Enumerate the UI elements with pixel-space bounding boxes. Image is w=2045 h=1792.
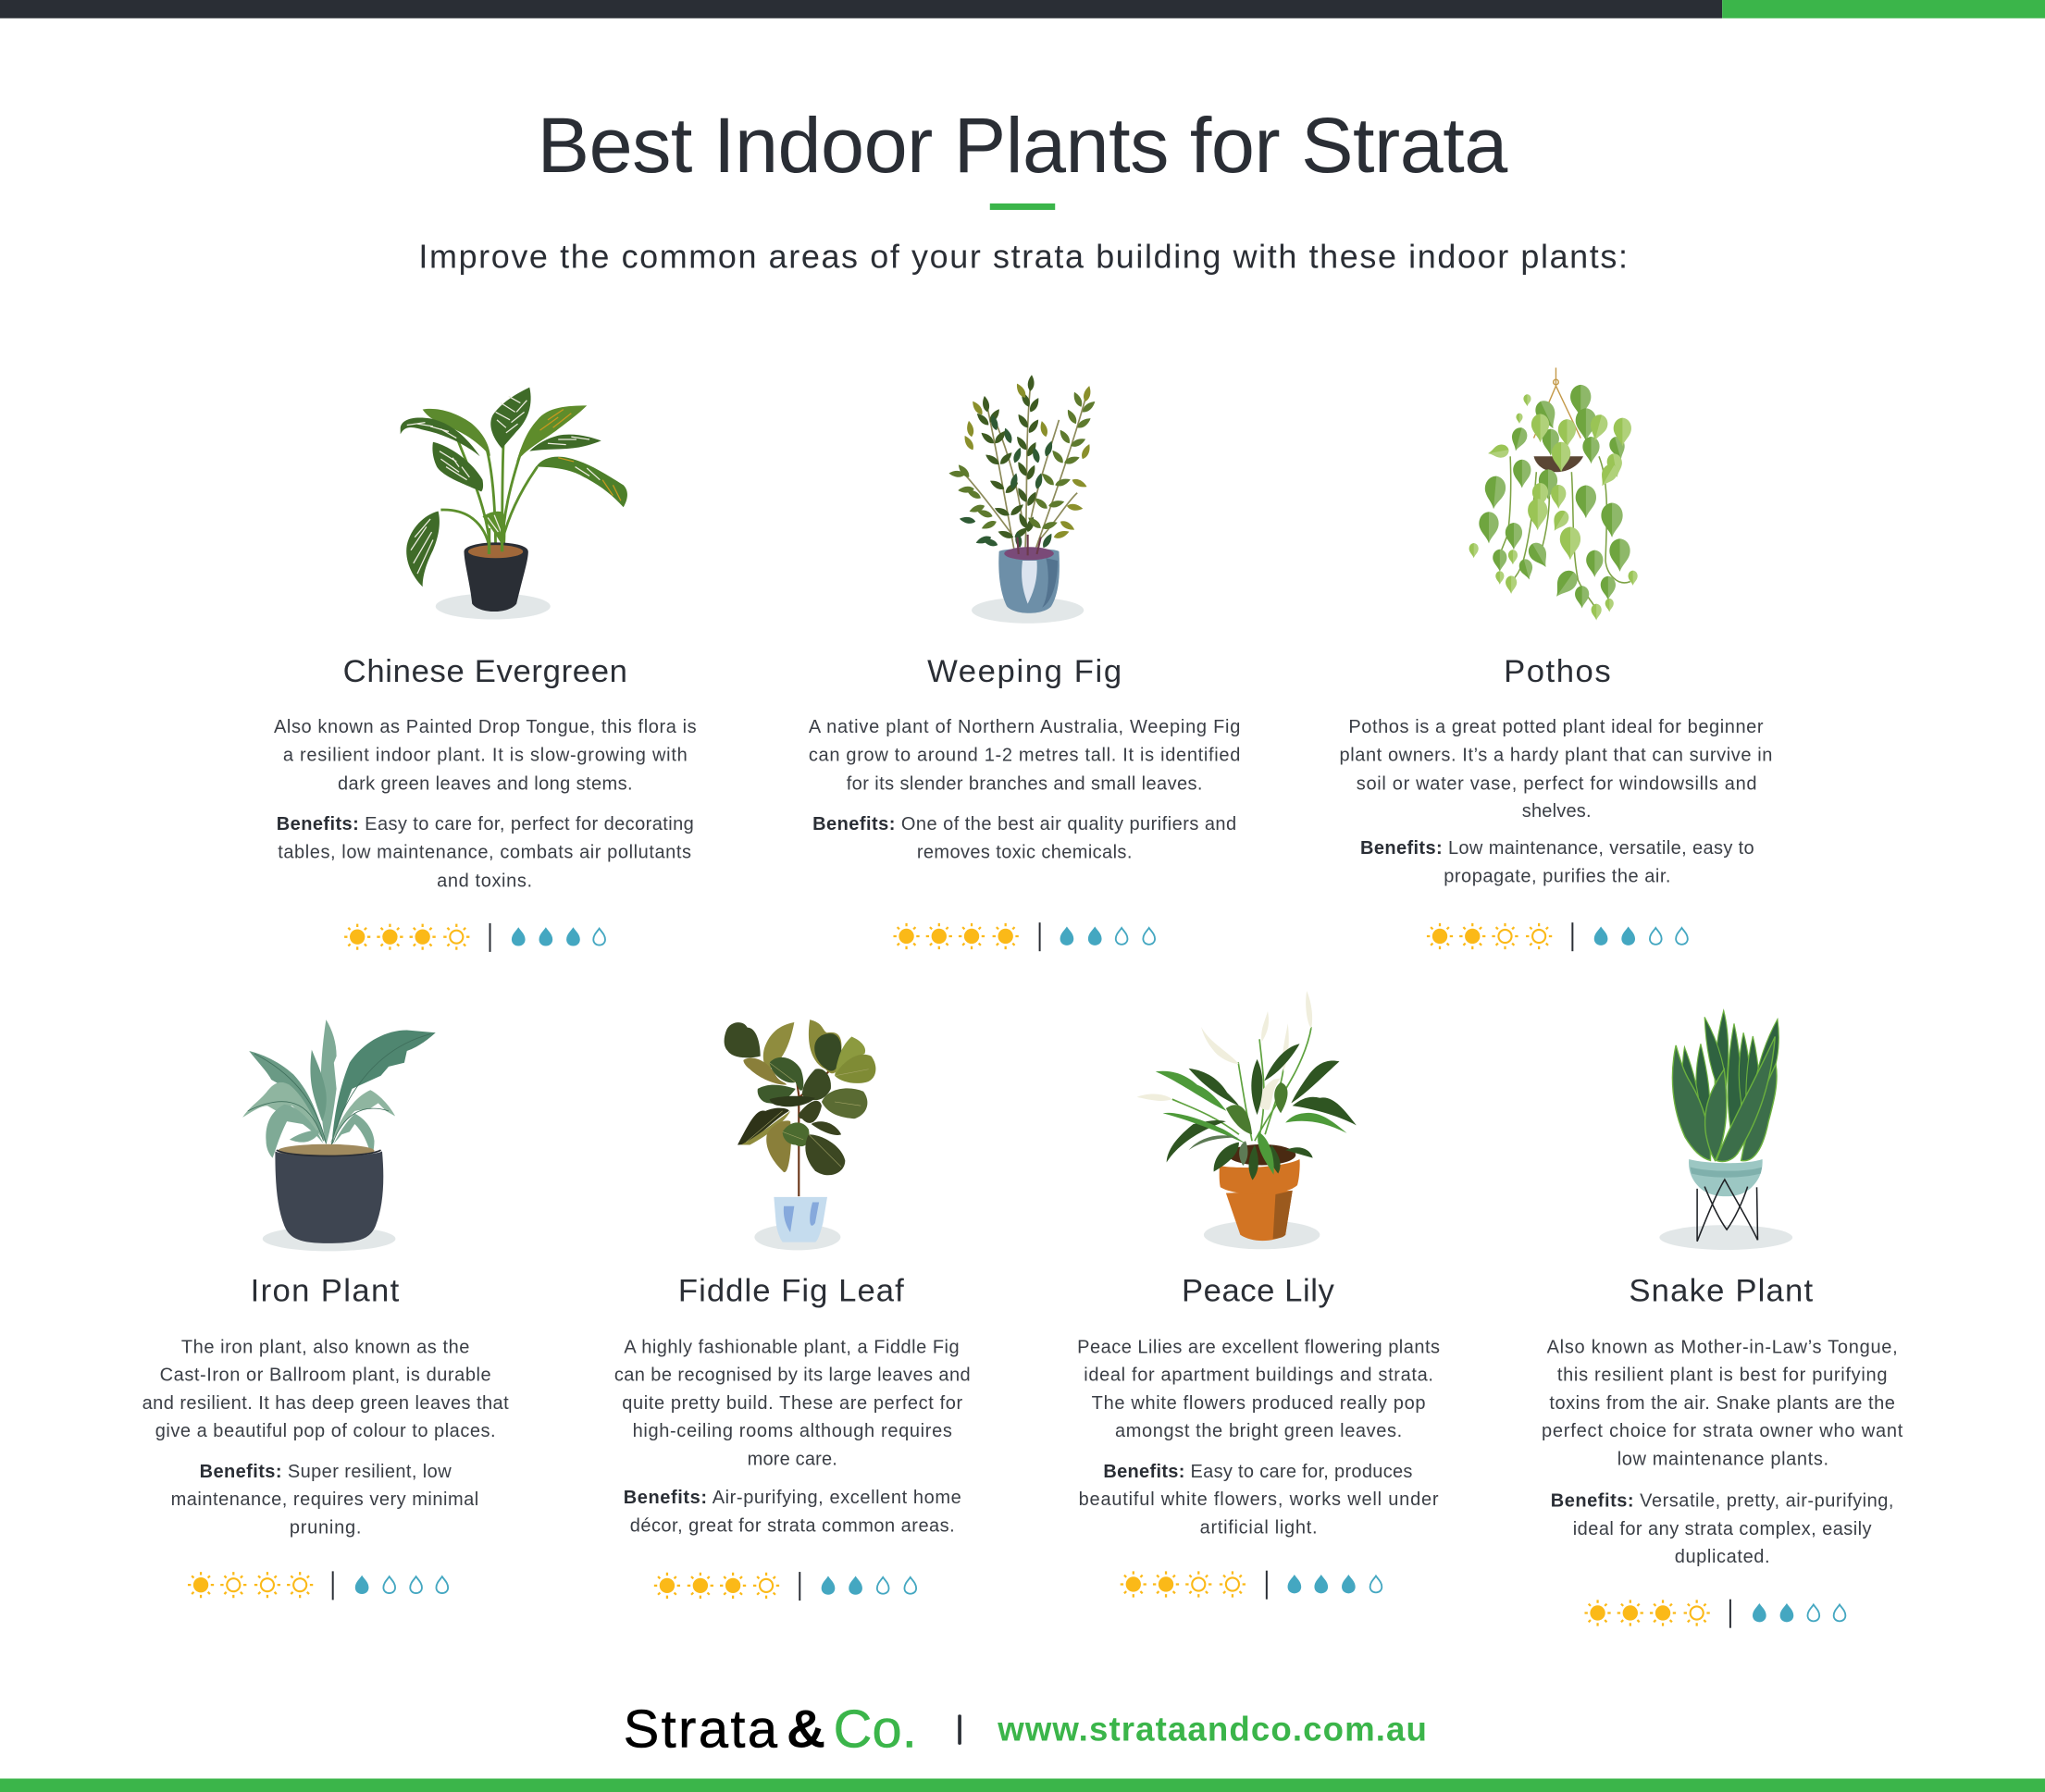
rating divider <box>1571 922 1573 951</box>
plant name: Pothos <box>1504 654 1611 689</box>
light rating <box>1427 923 1552 949</box>
description <box>614 1337 971 1470</box>
description: toxins from the air. Snake plants are the <box>1549 1393 1895 1414</box>
water rating <box>355 1576 448 1594</box>
benefits <box>1551 1491 1894 1567</box>
description: and resilient. It has deep green leaves that <box>143 1393 509 1414</box>
description: The white flowers produced really pop <box>1092 1393 1426 1414</box>
benefits: Benefits: Versatile, pretty, air-purifying, <box>1551 1491 1894 1512</box>
plant name: Peace Lily <box>1182 1274 1335 1309</box>
plant name: Snake Plant <box>1629 1274 1813 1309</box>
benefits <box>1079 1462 1439 1539</box>
rating divider <box>1729 1600 1731 1628</box>
description: for its slender branches and small leaves. <box>847 773 1203 794</box>
benefits: Benefits: One of the best air quality purifiers and <box>812 814 1236 834</box>
description: more care. <box>748 1450 837 1470</box>
description <box>809 717 1240 794</box>
description: Peace Lilies are excellent flowering plants <box>1077 1337 1440 1357</box>
benefits: Benefits: Super resilient, low <box>200 1462 452 1482</box>
benefits: Benefits: Low maintenance, versatile, easy to <box>1360 838 1754 859</box>
description <box>1542 1337 1903 1470</box>
light rating <box>893 923 1019 949</box>
light rating <box>344 924 469 950</box>
description: Cast-Iron or Ballroom plant, is durable <box>160 1366 491 1386</box>
footer logo <box>624 1700 917 1760</box>
rating divider <box>799 1572 800 1600</box>
panel: Chinese Evergreen <box>274 388 697 952</box>
description: quite pretty build. These are perfect for <box>622 1393 962 1414</box>
website url: www.strataandco.com.au <box>997 1711 1427 1749</box>
plant: Snake Plant <box>1659 1010 1792 1250</box>
benefits: Benefits: Easy to care for, produces <box>1103 1462 1412 1482</box>
panel: Pothos <box>1339 367 1772 951</box>
benefits <box>277 814 694 891</box>
plant: Peace Lily <box>1136 991 1357 1249</box>
description: A highly fashionable plant, a Fiddle Fig <box>624 1337 960 1357</box>
rating divider <box>1039 922 1041 951</box>
water rating <box>1288 1575 1382 1593</box>
benefits <box>1360 838 1754 886</box>
benefits: pruning. <box>290 1518 361 1539</box>
light rating <box>188 1572 313 1598</box>
footer logo: & <box>787 1700 825 1760</box>
water rating <box>1753 1603 1845 1622</box>
description <box>143 1337 509 1441</box>
panel: Weeping Fig <box>809 375 1240 951</box>
description <box>274 717 697 794</box>
description: a resilient indoor plant. It is slow-growing with <box>283 745 688 765</box>
description <box>1077 1337 1440 1441</box>
rating divider <box>490 923 491 952</box>
description <box>1339 717 1772 822</box>
light rating <box>1121 1571 1246 1598</box>
footer logo: Co. <box>834 1700 917 1760</box>
benefits: propagate, purifies the air. <box>1444 866 1670 886</box>
benefits <box>812 814 1236 862</box>
water rating <box>1060 927 1155 945</box>
benefits: décor, great for strata common areas. <box>630 1515 955 1536</box>
description: Also known as Painted Drop Tongue, this flora is <box>274 717 697 737</box>
description: dark green leaves and long stems. <box>338 773 633 794</box>
footer divider <box>958 1714 961 1745</box>
subtitle: Improve the common areas of your strata building with these indoor plants: <box>418 238 1628 276</box>
description: Pothos is a great potted plant ideal for beginner <box>1348 717 1764 737</box>
plant name: Fiddle Fig Leaf <box>678 1274 904 1309</box>
description: shelves. <box>1522 801 1592 822</box>
description: A native plant of Northern Australia, Weeping Fig <box>809 717 1240 737</box>
description: soil or water vase, perfect for windowsills and <box>1357 773 1757 794</box>
benefits: artificial light. <box>1200 1518 1318 1539</box>
title: Best Indoor Plants for Strata <box>538 101 1508 189</box>
description: this resilient plant is best for purifying <box>1557 1366 1887 1386</box>
description: perfect choice for strata owner who want <box>1542 1421 1903 1441</box>
description: give a beautiful pop of colour to places. <box>155 1421 496 1441</box>
plant: Chinese Evergreen <box>401 388 627 619</box>
panel: Peace Lily <box>1077 991 1440 1600</box>
water rating <box>1594 927 1688 945</box>
plant name: Chinese Evergreen <box>343 654 627 689</box>
plant: Iron Plant <box>242 1020 436 1251</box>
benefits: maintenance, requires very minimal <box>171 1489 478 1510</box>
benefits: ideal for any strata complex, easily <box>1573 1519 1872 1539</box>
description: can grow to around 1-2 metres tall. It is identified <box>809 745 1240 765</box>
footer logo: Strata <box>624 1700 778 1760</box>
benefits: beautiful white flowers, works well under <box>1079 1489 1439 1510</box>
plant: Fiddle Fig Leaf <box>725 1020 875 1250</box>
benefits: duplicated. <box>1675 1547 1770 1567</box>
description: amongst the bright green leaves. <box>1115 1421 1402 1441</box>
panel: Iron Plant <box>143 1020 509 1600</box>
panel: Snake Plant <box>1542 1010 1903 1628</box>
water rating <box>822 1576 916 1595</box>
top bar <box>0 0 2045 19</box>
description: low maintenance plants. <box>1617 1450 1828 1470</box>
description: can be recognised by its large leaves and <box>614 1366 971 1386</box>
water rating <box>512 927 605 946</box>
benefits: Benefits: Easy to care for, perfect for decorating <box>277 814 694 834</box>
description: ideal for apartment buildings and strata. <box>1084 1366 1433 1386</box>
bottom bar <box>0 1778 2045 1792</box>
light rating <box>654 1573 779 1599</box>
benefits: removes toxic chemicals. <box>917 842 1132 862</box>
benefits: and toxins. <box>437 871 532 891</box>
plant name: Iron Plant <box>251 1274 400 1309</box>
description: plant owners. It’s a hardy plant that can survive in <box>1339 745 1772 765</box>
benefits <box>171 1462 478 1539</box>
panel: Fiddle Fig Leaf <box>614 1020 971 1600</box>
plant: Weeping Fig <box>948 375 1097 624</box>
benefits: tables, low maintenance, combats air pollutants <box>278 842 691 862</box>
plant name: Weeping Fig <box>927 654 1122 689</box>
description: high-ceiling rooms although requires <box>633 1421 952 1441</box>
rating divider <box>332 1571 334 1600</box>
benefits: Benefits: Air-purifying, excellent home <box>624 1488 961 1508</box>
title underline <box>990 204 1055 210</box>
description: Also known as Mother-in-Law’s Tongue, <box>1547 1337 1898 1357</box>
description: The iron plant, also known as the <box>181 1337 469 1357</box>
plant: Pothos <box>1469 367 1638 620</box>
light rating <box>1584 1600 1710 1626</box>
rating divider <box>1266 1571 1268 1600</box>
benefits <box>624 1488 961 1536</box>
